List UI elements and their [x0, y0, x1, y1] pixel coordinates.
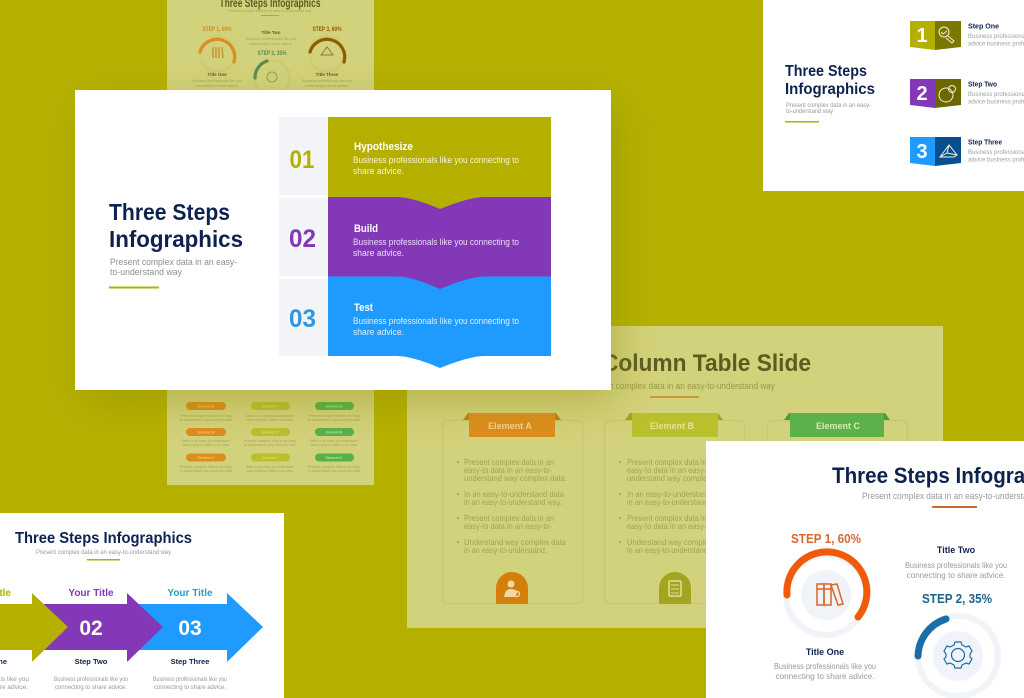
pills row 2: Element B [326, 430, 343, 434]
pills row 2: Data in an easy-to-understand [182, 439, 230, 443]
column A [442, 413, 582, 604]
column table subtitle: Present complex data in an easy-to-understand way [585, 381, 775, 392]
column B: Element B [650, 421, 695, 431]
top-right title: Three Steps [785, 63, 867, 80]
panel: faded circular steps slide (top centre) [167, 0, 374, 485]
pills row 2: Element B [198, 430, 215, 434]
step block 2: 2 [916, 83, 928, 105]
step block 1: 1 [916, 25, 928, 47]
arrows slide title: Three Steps Infographics [15, 530, 192, 547]
title one text: Business professionals like you [774, 661, 876, 671]
column A: Present complex data in an [464, 514, 554, 523]
column B: In an easy-to-understand data [627, 490, 728, 499]
panel: top-right numbered steps slide: Infographics [785, 81, 875, 98]
faded ring: step 3 [302, 26, 352, 88]
pills row 3: Element C [198, 456, 215, 460]
step 3 text: Business professionals like you connecting to [353, 316, 519, 326]
number column: 03 [289, 305, 316, 333]
faded ring: step 1: Title One [207, 72, 227, 77]
faded ring: step 1: STEP 1, 60% [202, 26, 232, 33]
step block 3: 3 [916, 141, 928, 163]
step 1 text [353, 141, 519, 176]
pills row 2 [182, 428, 358, 447]
faded ring: step 2 [246, 30, 296, 96]
column A: in an easy-to-understand way. [464, 498, 562, 507]
pills row 1: Present complex data in an easy [308, 414, 360, 418]
step band 3: blue [328, 276, 551, 368]
title two text: Business professionals like you [905, 560, 1007, 570]
column A: easy-to data in an easy-to- [464, 466, 552, 475]
step 1 ring [786, 532, 867, 635]
arrow step labels: Step Two [75, 657, 108, 666]
column B: easy-to data in an easy-to- [627, 466, 715, 475]
step 3 text: Test [354, 302, 373, 314]
arrow numbers [79, 617, 202, 640]
panel: main three steps slide [75, 90, 611, 390]
column A: Element A [488, 421, 532, 431]
arrow 3: blue [130, 593, 263, 662]
step 2 text [353, 223, 519, 258]
pills row 3: to understand way complex data [308, 469, 360, 473]
arrow titles: Your Title [167, 588, 213, 599]
number column [279, 117, 328, 356]
pills row 1: Element A [262, 404, 279, 408]
arrow step labels [0, 657, 209, 666]
pills row 2: Data in an easy-to-understand [310, 439, 358, 443]
top-right subtitle: Present complex data in an easy- [786, 102, 871, 109]
title two text: Title Two [937, 545, 976, 555]
faded ring: step 2: Business professionals like you [246, 37, 296, 41]
column A: in an easy-to-understand. [464, 546, 547, 555]
column C: Element C [816, 421, 861, 431]
column A: In an easy-to-understand data [464, 490, 565, 499]
arrow descriptions [0, 676, 227, 691]
column B: understand way complex data. [627, 474, 730, 483]
panel: faded column table slide [407, 326, 943, 628]
step block 2 [910, 79, 961, 108]
faded ring: step 1: Business professionals like you [192, 79, 242, 83]
arrow descriptions: Business professionals like you [153, 676, 227, 683]
pills row 3: way complex data in an easy [247, 469, 293, 473]
main subtitle: to-understand way [110, 267, 182, 278]
pills row 1: Data in an easy-to-understand [246, 414, 294, 418]
column A: Present complex data in an [464, 458, 554, 467]
panel: top-right numbered steps slide [763, 0, 1024, 191]
pills row 3 [180, 454, 360, 473]
column B: easy-to data in an easy-to- [627, 522, 715, 531]
number column: 01 [290, 146, 315, 174]
step 2 text: Business professionals like you connecting to [353, 237, 519, 247]
step band 2: purple [328, 197, 551, 289]
pills row 1: way complex data in an easy [247, 418, 293, 422]
pills row 1: to understand way complex data [308, 418, 360, 422]
faded ring: step 1: connecting to share advice. [195, 84, 239, 88]
title one text: connecting to share advice. [776, 671, 874, 681]
step 3 text [353, 302, 519, 337]
step 1 ring: STEP 1, 60% [791, 532, 861, 546]
pills row 3: Data in an easy-to-understand [246, 465, 294, 469]
column B: Present complex data in an [627, 458, 717, 467]
pills row 2: to understand way complex data [244, 443, 296, 447]
faded ring: step 3: Business professionals like you [302, 79, 352, 83]
faded ring: step 3: connecting to share advice. [305, 84, 349, 88]
step 2 text: Step Two [968, 82, 997, 88]
step block 3 [910, 137, 961, 166]
pills row 1: Present complex data in an easy [180, 414, 232, 418]
pills row 3: Element C [326, 456, 343, 460]
column B: in an easy-to-understand way. [627, 498, 725, 507]
column B: Present complex data in an [627, 514, 717, 523]
pills row 1: Element A [198, 404, 215, 408]
arrow descriptions: Business professionals like you [54, 676, 128, 683]
step 1 text [968, 24, 1024, 48]
column C [768, 413, 908, 604]
column B: in an easy-to-understand. [627, 546, 710, 555]
faded subtitle: Present complex data in an easy-to-understand way [229, 9, 312, 13]
step 1 text: Step One [968, 24, 999, 30]
pills row 3: Element C [262, 456, 279, 460]
main subtitle [110, 257, 237, 278]
step 3 text: Step Three [968, 140, 1002, 146]
column A: Understand way complex data [464, 538, 567, 547]
arrow numbers: 03 [178, 617, 202, 640]
step 1 text: Business professionals like you connecting to [353, 155, 519, 165]
step 2 text [968, 82, 1024, 106]
pills row 2: way complex data in an easy [183, 443, 229, 447]
arrow numbers: 02 [79, 617, 103, 640]
faded ring: step 3: STEP 3, 60% [312, 26, 342, 33]
column table title: 3 Column Table Slide [583, 350, 811, 377]
arrows slide subtitle: Present complex data in an easy-to-understand way [36, 549, 172, 556]
title two text [905, 545, 1007, 580]
number column: 02 [289, 225, 316, 253]
column A: understand way complex data. [464, 474, 567, 483]
step block 1 [910, 21, 961, 50]
pills row 3: Present complex data in an easy [308, 465, 360, 469]
step 2 text: Build [354, 223, 378, 235]
pills row 2: Element B [262, 430, 279, 434]
arrow titles: Your Title [68, 588, 114, 599]
panel: bottom-left arrows slide [0, 513, 284, 698]
pills row 2: Present complex data in an easy [244, 439, 296, 443]
pills row 1: Element A [326, 404, 343, 408]
step 2 ring: STEP 2, 35% [922, 592, 992, 606]
step 3 text [968, 140, 1024, 164]
pills row 3: to understand way complex data [180, 469, 232, 473]
faded ring: step 2: Title Two [261, 30, 281, 35]
step band 1: olive [328, 117, 551, 209]
arrow descriptions: connecting to share advice. [154, 684, 226, 691]
faded ring: step 1 [192, 26, 242, 88]
main title [109, 199, 243, 252]
panel: bottom-right circular steps slide [706, 441, 1024, 698]
title two text: connecting to share advice. [906, 570, 1006, 580]
title one text [774, 647, 876, 681]
step 1 text: Hypothesize [354, 141, 413, 153]
step 3 text: share advice. [353, 327, 404, 337]
step 2 ring [918, 592, 998, 696]
title one text: Title One [806, 647, 844, 657]
arrow 2: purple [30, 593, 163, 662]
panel shadow: soft glow behind main card [85, 105, 615, 400]
column A: easy-to data in an easy-to- [464, 522, 552, 531]
column B: Understand way complex data [627, 538, 730, 547]
faded ring: step 2: connecting to share advice. [249, 42, 293, 46]
faded ring: step 3: Title Three [316, 72, 339, 77]
pills row 1 [180, 402, 360, 422]
pills row 2: way complex data in an easy [311, 443, 357, 447]
main title: Three Steps [109, 199, 230, 225]
arrow 1: olive [0, 593, 68, 662]
faded ring: step 2: STEP 2, 35% [258, 50, 287, 57]
arrow step labels: Step Three [171, 657, 209, 666]
panel: top-right numbered steps slide: to-understand way [786, 108, 834, 115]
pills row 1: to understand way complex data [180, 418, 232, 422]
step 1 text: share advice. [353, 166, 404, 176]
main title: Infographics [109, 226, 243, 252]
step 2 text: share advice. [353, 248, 404, 258]
arrow titles [0, 588, 213, 599]
panel: faded element pills grid (below main card) [180, 402, 360, 473]
arrow descriptions: connecting to share advice. [55, 684, 127, 691]
main subtitle: Present complex data in an easy- [110, 257, 237, 268]
column B [604, 413, 744, 604]
pills row 3: Present complex data in an easy [180, 465, 232, 469]
